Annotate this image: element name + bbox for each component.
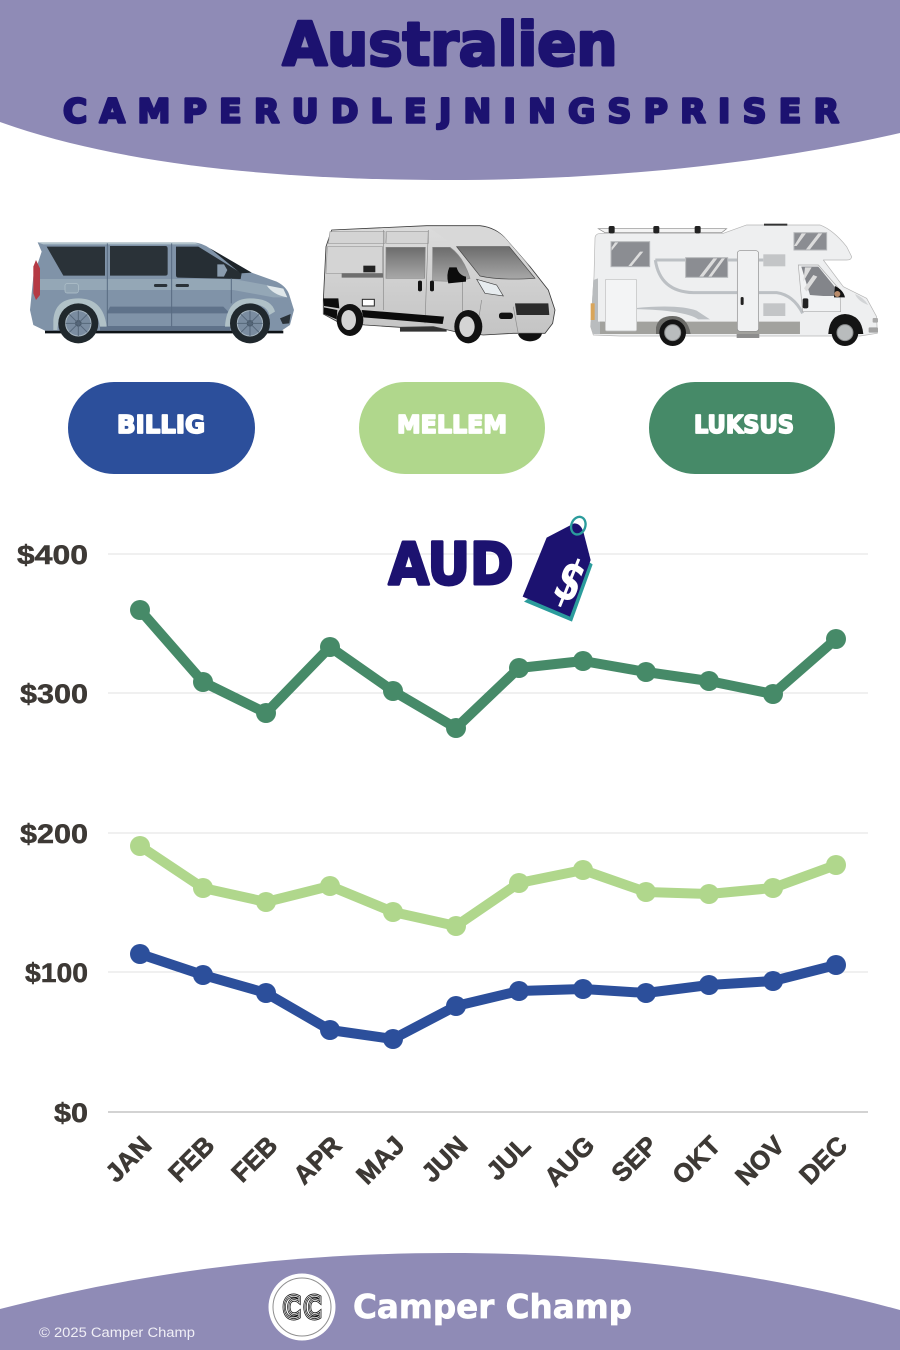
icon: luxury motorhome bbox=[591, 224, 878, 346]
y axis labels: $100 bbox=[25, 958, 88, 988]
logo: CC bbox=[283, 1291, 321, 1326]
x axis labels: NOV bbox=[729, 1130, 791, 1191]
icon: price tag bbox=[523, 515, 594, 622]
title: Australien bbox=[282, 10, 618, 80]
line chart: monthly prices bbox=[17, 540, 868, 1192]
header banner bbox=[0, 0, 900, 180]
logo: CC bbox=[283, 1291, 321, 1326]
brand name: Camper Champ bbox=[353, 1287, 632, 1326]
x axis labels: FEB bbox=[162, 1130, 220, 1188]
button: mellem bbox=[359, 382, 545, 474]
copyright: © 2025 Camper Champ bbox=[39, 1325, 195, 1340]
logo bbox=[268, 1274, 336, 1340]
x axis labels: APR bbox=[287, 1130, 347, 1190]
y axis labels bbox=[17, 540, 88, 1128]
button: luksus: LUKSUS bbox=[694, 410, 794, 439]
icon: price tag: $ bbox=[545, 546, 594, 617]
x axis labels: DEC bbox=[793, 1130, 853, 1190]
button: billig: BILLIG bbox=[117, 410, 205, 439]
footer banner bbox=[0, 1253, 900, 1350]
icon: budget minivan bbox=[30, 242, 294, 343]
y axis labels: $200 bbox=[20, 819, 88, 849]
series: mellem bbox=[130, 836, 846, 936]
subtitle: CAMPERUDLEJNINGSPRISER bbox=[63, 92, 839, 130]
y axis labels: $0 bbox=[54, 1098, 88, 1128]
x axis labels: JUN bbox=[415, 1130, 473, 1188]
button: luksus bbox=[649, 382, 835, 474]
currency label: AUD: AUD bbox=[388, 530, 514, 598]
x axis labels: JAN bbox=[99, 1130, 157, 1188]
x axis labels bbox=[99, 1130, 853, 1192]
x axis labels: FEB bbox=[225, 1130, 283, 1188]
button: billig bbox=[68, 382, 255, 474]
x axis labels: OKT bbox=[666, 1130, 726, 1190]
series: billig bbox=[130, 944, 846, 1049]
y axis labels: $300 bbox=[20, 679, 88, 709]
x axis labels: MAJ bbox=[350, 1130, 410, 1190]
series: luksus bbox=[130, 600, 846, 738]
x axis labels: JUL bbox=[480, 1130, 536, 1186]
y axis labels: $400 bbox=[17, 540, 88, 570]
logo: CC bbox=[283, 1291, 321, 1326]
x axis labels: AUG bbox=[538, 1130, 600, 1192]
button: mellem: MELLEM bbox=[397, 410, 507, 439]
icon: mid-range van bbox=[323, 226, 555, 343]
x axis labels: SEP bbox=[605, 1130, 663, 1188]
